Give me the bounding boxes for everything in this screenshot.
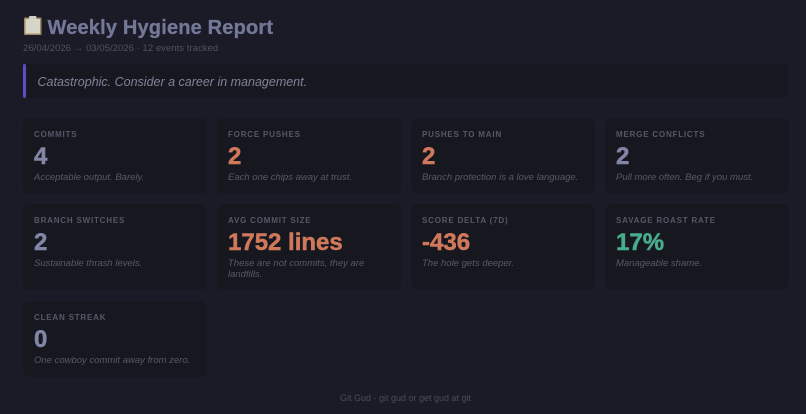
subtitle: date range: 26/04/2026 → 03/05/2026 · 12 events tracked	[23, 42, 218, 54]
stat card: savage roast rate	[605, 204, 789, 290]
stat card: avg commit size: These are not commits, they are landfills.	[228, 258, 364, 280]
stat card: merge conflicts: MERGE CONFLICTS	[616, 130, 705, 139]
stat card: avg commit size	[217, 204, 401, 290]
stat card: clean streak	[23, 301, 207, 377]
stat card: branch switches	[23, 204, 207, 290]
stat card: savage roast rate: 17%	[616, 228, 664, 256]
stat card: force pushes: Each one chips away at trust.	[228, 172, 352, 183]
callout text: Catastrophic. Consider a career in management.	[38, 74, 307, 88]
verdict callout	[23, 64, 788, 98]
stat card: clean streak: One cowboy commit away from zero.	[34, 355, 190, 366]
stat card: force pushes	[217, 118, 401, 194]
callout accent bar	[23, 64, 26, 98]
stat card: score delta: -436	[422, 228, 470, 256]
stat card: pushes to main	[411, 118, 595, 194]
stat card: avg commit size: AVG COMMIT SIZE	[228, 216, 311, 225]
stat card: score delta	[411, 204, 595, 290]
stat card: pushes to main: PUSHES TO MAIN	[422, 130, 502, 139]
stat card: branch switches: BRANCH SWITCHES	[34, 216, 125, 225]
footer: Git Gud · git gud or get gud at git	[340, 393, 471, 403]
stat card: force pushes: FORCE PUSHES	[228, 130, 301, 139]
stat card: pushes to main: 2	[422, 142, 435, 170]
stat card: branch switches: 2	[34, 228, 47, 256]
stat card: clean streak: 0	[34, 326, 47, 352]
title: Weekly Hygiene Report	[48, 16, 273, 38]
stat card: merge conflicts: Pull more often. Beg if you must.	[616, 172, 753, 183]
stat card: commits	[23, 118, 207, 194]
stat card: clean streak: CLEAN STREAK	[34, 313, 106, 322]
stat card: pushes to main: Branch protection is a love language.	[422, 172, 578, 183]
stat card: savage roast rate: Manageable shame.	[616, 258, 702, 269]
stat card: merge conflicts	[605, 118, 789, 194]
stat card: savage roast rate: SAVAGE ROAST RATE	[616, 216, 716, 225]
stat card: force pushes: 2	[228, 142, 241, 170]
stat card: commits: 4	[34, 142, 47, 170]
stat card: avg commit size: 1752 lines	[228, 228, 343, 256]
stat card: score delta: SCORE DELTA (7D)	[422, 216, 508, 225]
stat card: score delta: The hole gets deeper.	[422, 258, 514, 269]
stat card: commits: COMMITS	[34, 130, 77, 139]
stat card: branch switches: Sustainable thrash levels.	[34, 258, 142, 269]
icon: clipboard	[24, 16, 42, 35]
stat card: merge conflicts: 2	[616, 142, 629, 170]
stat card: commits: Acceptable output. Barely.	[34, 172, 144, 183]
